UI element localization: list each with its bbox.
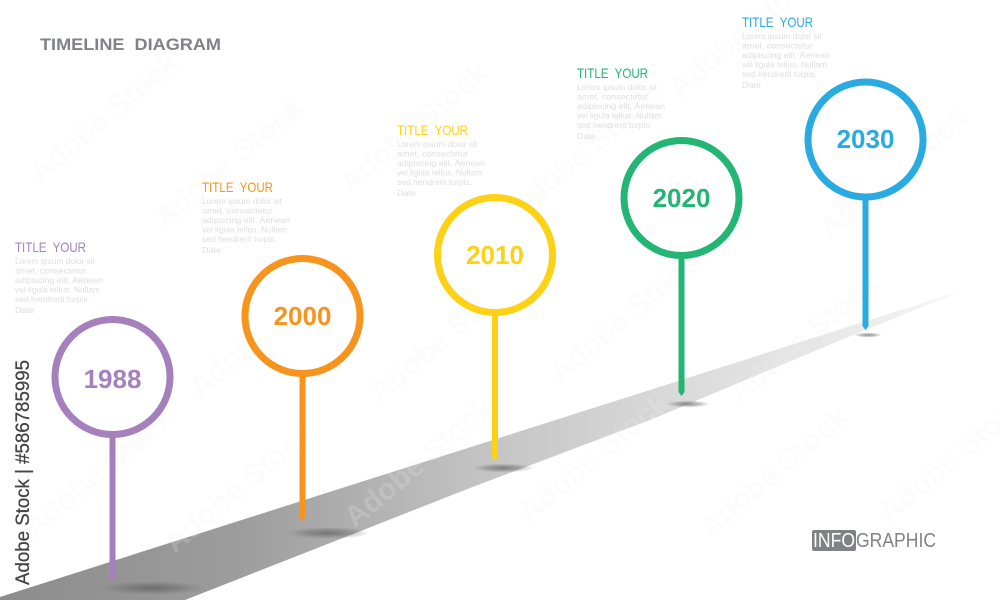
- watermark: Adobe Stock: [333, 56, 495, 199]
- text block: 1988: sed hendrerit turpis.: [15, 294, 90, 304]
- text block: 2030: adipiscing elit. Aenean: [742, 50, 830, 60]
- watermark: Adobe Stock: [338, 391, 500, 534]
- pin: 2030: [808, 82, 923, 330]
- text block: 2000: Lorem ipsum dolor sit: [202, 196, 283, 206]
- text block: 1988: amet, consectetur: [15, 266, 86, 276]
- pin: 2010: [438, 198, 552, 461]
- text block: 2000: Date: [202, 245, 221, 255]
- text block: 1988: [15, 239, 103, 315]
- watermark: Adobe Stock: [813, 101, 975, 244]
- text block: 2020: TITLE YOUR: [577, 65, 648, 81]
- watermark: Adobe Stock: [503, 81, 665, 224]
- text block: 2000: adipiscing elit. Aenean: [202, 215, 290, 225]
- text block: 2030: Date: [742, 80, 761, 90]
- text block: 2020: Date: [577, 131, 596, 141]
- text block: 2020: sed hendrerit turpis.: [577, 120, 652, 130]
- text block: 2010: amet, consectetur: [397, 148, 468, 158]
- milestone 1988: [15, 239, 170, 582]
- text block: 2010: Date: [397, 188, 416, 198]
- text block: 2000: sed hendrerit turpis.: [202, 234, 277, 244]
- watermark: Adobe Stock: [693, 401, 855, 544]
- milestone 2030: [742, 14, 923, 330]
- text block: 2030: Lorem ipsum dolor sit: [742, 31, 823, 41]
- text block: 2020: adipiscing elit. Aenean: [577, 101, 665, 111]
- milestone 2010: [397, 122, 552, 461]
- text block: 2010: [397, 122, 485, 198]
- watermark: Adobe Stock: [513, 386, 675, 529]
- text block: 1988: TITLE YOUR: [15, 239, 86, 255]
- text block: 1988: vel ligula tellus. Nullam: [15, 284, 100, 294]
- watermark: Adobe Stock: [148, 91, 310, 234]
- text block: 2020: [577, 65, 665, 141]
- text block: 2010: sed hendrerit turpis.: [397, 177, 472, 187]
- text block: 2030: sed hendrerit turpis.: [742, 69, 817, 79]
- pin: 2000: [245, 258, 360, 521]
- watermark: Adobe Stock: [723, 266, 885, 409]
- watermark: Adobe Stock: [363, 266, 525, 409]
- pin: 2000: 2000: [274, 301, 331, 331]
- text block: 2010: Lorem ipsum dolor sit: [397, 139, 478, 149]
- road: [0, 288, 970, 600]
- text block: 1988: Lorem ipsum dolor sit: [15, 256, 96, 266]
- text block: 2000: [202, 179, 290, 255]
- text block: 2010: vel ligula tellus. Nullam: [397, 168, 482, 178]
- pin: 1988: [55, 320, 170, 582]
- watermark: Adobe Stock: [18, 401, 180, 544]
- text block: 2030: amet, consectetur: [742, 40, 813, 50]
- pin: 2010: 2010: [466, 240, 524, 270]
- text block: 2000: vel ligula tellus. Nullam: [202, 224, 287, 234]
- text block: 2030: [742, 14, 830, 90]
- text block: 2010: TITLE YOUR: [397, 122, 468, 138]
- pin: 2020: 2020: [653, 183, 710, 213]
- watermark: Adobe Stock: [183, 261, 345, 404]
- stock id label: Adobe Stock | #586785995: [13, 360, 34, 585]
- watermark: Adobe Stock: [543, 246, 705, 389]
- milestone 2000: [202, 179, 360, 521]
- infographic logo: INFO: [813, 530, 855, 552]
- text block: 2030: vel ligula tellus. Nullam: [742, 60, 827, 70]
- milestone 2020: [577, 65, 739, 396]
- text block: 1988: Date: [15, 305, 34, 315]
- text block: 2020: Lorem ipsum dolor sit: [577, 82, 658, 92]
- watermark: Adobe Stock: [23, 46, 185, 189]
- pin: 2020: [624, 140, 739, 396]
- pin: 2030: 2030: [837, 124, 894, 154]
- pin: 1988: 1988: [84, 364, 141, 394]
- text block: 1988: adipiscing elit. Aenean: [15, 275, 103, 285]
- text block: 2020: vel ligula tellus. Nullam: [577, 110, 662, 120]
- infographic logo: [812, 530, 936, 552]
- text block: 2020: amet, consectetur: [577, 92, 648, 102]
- text block: 2010: adipiscing elit. Aenean: [397, 158, 485, 168]
- title: TIMELINE DIAGRAM: [40, 35, 221, 54]
- watermark: Adobe Stock: [158, 416, 320, 559]
- text block: 2030: TITLE YOUR: [742, 14, 813, 30]
- text block: 2000: amet, consectetur: [202, 206, 273, 216]
- text block: 2000: TITLE YOUR: [202, 179, 273, 195]
- pin shadows: [96, 332, 882, 595]
- infographic logo: GRAPHIC: [856, 530, 936, 552]
